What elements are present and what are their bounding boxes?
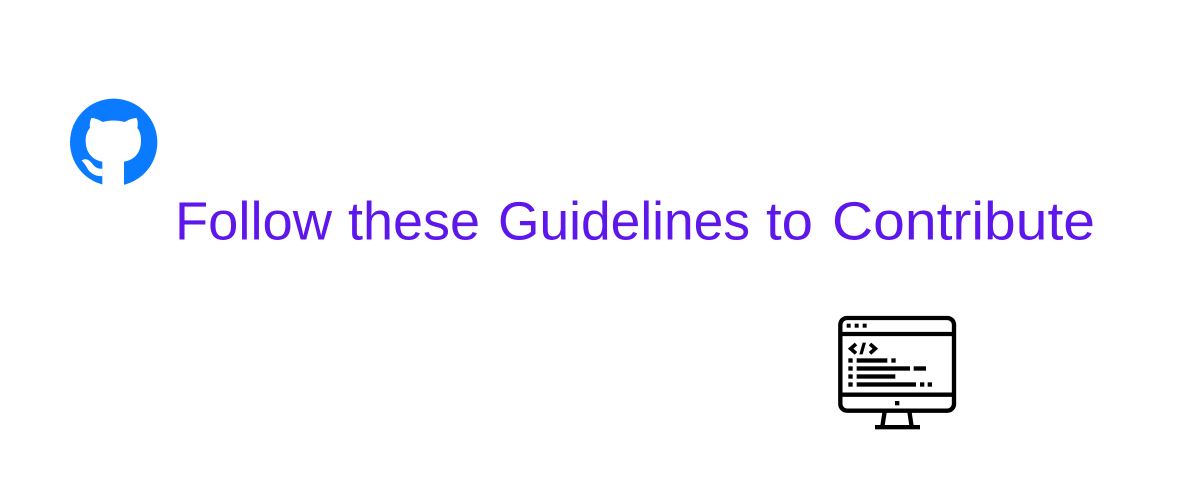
title: these — [348, 192, 480, 252]
icon: GitHub logo — [70, 98, 158, 185]
title — [175, 192, 1095, 252]
title: Follow — [175, 192, 333, 252]
title: Contribute — [832, 192, 1095, 252]
title: to — [766, 192, 813, 252]
title: Guidelines — [498, 192, 750, 252]
icon: code monitor — [838, 316, 956, 430]
